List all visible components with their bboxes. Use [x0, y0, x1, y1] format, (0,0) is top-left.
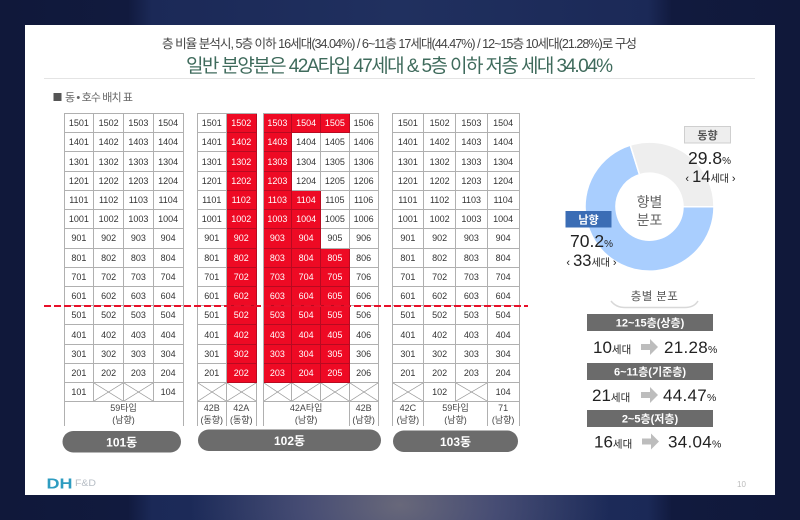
logo: F&D	[75, 478, 97, 488]
table: building 103 units: 1002	[430, 214, 450, 224]
page number: 10	[737, 480, 746, 489]
table: building 101 units: 1001	[69, 214, 89, 224]
table: building 102 right line units: 1203	[267, 176, 287, 186]
table: building 103 units: 1004	[493, 214, 513, 224]
table: building 102 right line units: 504	[299, 310, 314, 320]
table: building 103 units: 901	[400, 233, 415, 243]
table: building 102 left line units: 801	[204, 253, 219, 263]
table: building 103 units: 1404	[493, 137, 513, 147]
heading: floor distribution	[611, 290, 698, 308]
table: building 102 right line units: 305	[327, 349, 342, 359]
table: building 102 left line units: 1402	[231, 137, 251, 147]
table: building 102 left line units: 1101	[202, 195, 221, 205]
table: building 102 left line units: 701	[204, 272, 219, 282]
table: building 103 units: 1304	[493, 157, 513, 167]
callout: south facing: ‹ 33세대 ›	[566, 252, 617, 270]
table: building 102 right line units: 42A타입	[290, 403, 322, 413]
callout: east facing: ‹ 14세대 ›	[685, 168, 736, 186]
table: building 102 right line units: 1005	[325, 214, 345, 224]
pill: building 101: 101동	[106, 436, 137, 450]
table: building 101 units: 1204	[158, 176, 178, 186]
table: building 101 units: (남향)	[112, 415, 135, 425]
table: building 103 units: 42C	[400, 403, 416, 413]
table: building 102 right line units: 704	[299, 272, 314, 282]
table: building 102 right line units: 705	[327, 272, 342, 282]
table: building 103 units: 503	[464, 310, 479, 320]
callout: east facing: 동향	[697, 128, 718, 142]
table: building 102 left line units: 1002	[231, 214, 251, 224]
table: building 102 right line units: 1206	[354, 176, 374, 186]
table: building 102 right line units: 805	[327, 253, 342, 263]
table: building 102 right line units: 703	[270, 272, 285, 282]
row: high floors: 21.28%	[664, 338, 718, 357]
table: building 103 units: 1401	[398, 137, 418, 147]
table: building 101 units: 1003	[128, 214, 148, 224]
table: building 101 units: 903	[131, 233, 146, 243]
table: building 103 units: 1402	[430, 137, 450, 147]
table: building 102 left line units: (동향)	[230, 415, 253, 425]
table: building 103 units: 801	[400, 253, 415, 263]
table: building 101 units: 1101	[69, 195, 89, 205]
callout: east facing: 29.8%	[688, 148, 731, 168]
table: building 102 left line units: 502	[234, 310, 249, 320]
table: building 103 units: (남향)	[492, 415, 514, 425]
table: building 101 units: 303	[131, 349, 146, 359]
table: building 103 units: 603	[464, 291, 479, 301]
table: building 101 units: 1201	[69, 176, 89, 186]
table: building 102 right line units: 803	[270, 253, 285, 263]
table: building 103 units: 903	[464, 233, 479, 243]
table: building 102 right line units: 503	[270, 310, 285, 320]
floor divider dashed line	[44, 305, 528, 307]
table: building 101 units: 1202	[99, 176, 119, 186]
table: building 103 units: 204	[496, 368, 511, 378]
row: high floors: 12~15층(상층)	[616, 316, 685, 330]
table: building 102 left line units: 601	[204, 291, 219, 301]
table: building 102 right line units: 906	[356, 233, 371, 243]
table: building 101 units: 1303	[128, 157, 148, 167]
table: building 101 units: 1302	[99, 157, 119, 167]
table: building 101 units: 702	[101, 272, 116, 282]
table: building 102 left line units: 702	[234, 272, 249, 282]
table: building 102 right line units: 903	[270, 233, 285, 243]
table: building 102 right line units: 1106	[354, 195, 373, 205]
callout: east facing	[684, 126, 736, 186]
table: building 102 right line units: 403	[270, 330, 285, 340]
table: building 101 units: 804	[161, 253, 176, 263]
table: building 103 units: 504	[496, 310, 511, 320]
table: building 101 units: 502	[101, 310, 116, 320]
table: building 101 units: 801	[71, 253, 86, 263]
table: building 101 units: 1503	[128, 118, 148, 128]
table: building 102 right line units: 1103	[268, 195, 287, 205]
table: building 101 units: 1102	[99, 195, 118, 205]
table: building 103 units: 1201	[398, 176, 418, 186]
table: building 103 units: 1103	[462, 195, 481, 205]
headline: 일반 분양분은 42A타입 47세대 & 5층 이하 저층 세대 34.04%	[186, 55, 613, 77]
table: building 103 units: 501	[400, 310, 415, 320]
table: building 101 units: 501	[71, 310, 86, 320]
subtitle: 층 비율 분석시, 5층 이하 16세대(34.04%) / 6~11층 17세대(44.47%) / 12~15층 10세대(21.28%)로 구성	[162, 37, 637, 51]
table: building 102 right line units: 606	[356, 291, 371, 301]
table: building 101 units: 504	[161, 310, 176, 320]
table: building 102 right line units: 1004	[296, 214, 316, 224]
table: building 103 units: 802	[432, 253, 447, 263]
table: building 102 left line units: 1202	[231, 176, 251, 186]
table: building 101 units: 604	[161, 291, 176, 301]
table: building 103 units: 303	[464, 349, 479, 359]
row: low floors	[587, 410, 722, 452]
table: building 102 right line units: 405	[327, 330, 342, 340]
table: building 102 right line units: 205	[327, 368, 342, 378]
table: building 102 right line units: 1003	[267, 214, 287, 224]
table: building 102 left line units: 202	[234, 368, 249, 378]
table: building 102 left line units: 1502	[231, 118, 251, 128]
table: building 102 left line units: 802	[234, 253, 249, 263]
donut chart: orientation split: 향별	[637, 194, 662, 210]
table: building 103 units: 1003	[461, 214, 481, 224]
table: building 103 units: 704	[496, 272, 511, 282]
table: building 103 units: 1501	[398, 118, 418, 128]
callout: south facing: 70.2%	[570, 231, 613, 251]
table: building 101 units: 703	[131, 272, 146, 282]
table: building 103 units: 1303	[461, 157, 481, 167]
table: building 102 right line units: 603	[270, 291, 285, 301]
section label: unit layout table: 동 • 호수 배치 표	[65, 91, 133, 104]
table: building 103 units: (남향)	[397, 415, 419, 425]
table: building 101 units: 1103	[129, 195, 148, 205]
table: building 103 units: 1102	[430, 195, 449, 205]
row: high floors	[587, 314, 718, 357]
table: building 101 units: 803	[131, 253, 146, 263]
table: building 102 right line units: 1205	[325, 176, 345, 186]
table: building 101 units: 302	[101, 349, 116, 359]
table: building 102 right line units: 1105	[325, 195, 345, 205]
table: building 103 units: 1301	[398, 157, 418, 167]
table: building 103 units: 202	[432, 368, 447, 378]
table: building 102 left line units: 1001	[202, 214, 222, 224]
table: building 101 units: 1002	[99, 214, 119, 224]
table: building 102 left line units: 401	[204, 330, 219, 340]
table: building 102 right line units: 1306	[354, 157, 374, 167]
table: building 103 units: 902	[432, 233, 447, 243]
table: building 101 units: 1401	[69, 137, 89, 147]
table: building 101 units: 403	[131, 330, 146, 340]
table: building 101 units: 902	[101, 233, 116, 243]
table: building 103 units: 1302	[430, 157, 450, 167]
row: mid floors: 21세대	[592, 386, 630, 405]
table: building 103 units: 601	[400, 291, 415, 301]
table: building 101 units: 1004	[158, 214, 178, 224]
table: building 102 right line units: 303	[270, 349, 285, 359]
table: building 103 units: 1504	[493, 118, 513, 128]
table: building 101 units: 59타입	[110, 403, 137, 413]
table: building 103 units: 402	[432, 330, 447, 340]
table: building 103 units: 203	[464, 368, 479, 378]
table: building 102 right line units: 1505	[325, 118, 345, 128]
table: building 101 units: 1504	[158, 118, 178, 128]
callout: south facing	[566, 211, 617, 270]
row: low floors: 16세대	[594, 432, 632, 452]
table: building 101 units: 404	[161, 330, 176, 340]
table: building 101 units: 101	[71, 387, 86, 397]
table: building 102 left line units: 901	[204, 233, 219, 243]
donut chart: orientation split: 분포	[637, 212, 662, 228]
table: building 102 left line units: 602	[234, 291, 249, 301]
table: building 102 right line units: 1006	[354, 214, 374, 224]
table: building 102 right line units: 1406	[354, 137, 374, 147]
table: building 102 right line units: 904	[299, 233, 314, 243]
table: building 103 units: 102	[432, 387, 447, 397]
table: building 101 units: 704	[161, 272, 176, 282]
table: building 103 units: (남향)	[444, 415, 467, 425]
table: building 101 units: 904	[161, 233, 176, 243]
table: building 101 units: 201	[71, 368, 86, 378]
table: building 103 units: 302	[432, 349, 447, 359]
table: building 103 units: 502	[432, 310, 447, 320]
table: building 102 left line units: 201	[204, 368, 219, 378]
table: building 102 left line units: 1201	[202, 176, 222, 186]
table: building 102 left line units: (동향)	[200, 415, 223, 425]
table: building 103 units: 604	[496, 291, 511, 301]
table: building 102 right line units	[262, 113, 378, 426]
table: building 101 units: 104	[161, 387, 176, 397]
table: building 101 units: 701	[71, 272, 86, 282]
table: building 102 right line units: 706	[356, 272, 371, 282]
pill: building 102	[198, 430, 381, 451]
pill: building 101	[62, 431, 181, 452]
table: building 103 units: 404	[496, 330, 511, 340]
table: building 102 right line units: 505	[327, 310, 342, 320]
table: building 103 units: 1203	[461, 176, 481, 186]
table: building 102 right line units: 605	[327, 291, 342, 301]
pill: building 103	[393, 430, 518, 452]
table: building 102 right line units: 604	[299, 291, 314, 301]
table: building 102 right line units: 404	[299, 330, 314, 340]
table: building 101 units: 401	[71, 330, 86, 340]
logo	[46, 476, 97, 492]
table: building 101 units: 603	[131, 291, 146, 301]
table: building 102 left line units: 402	[234, 330, 249, 340]
table: building 103 units: 403	[464, 330, 479, 340]
table: building 101 units: 1501	[69, 118, 89, 128]
row: low floors: 2~5층(저층)	[622, 412, 679, 426]
table: building 102 left line units: 1301	[202, 157, 222, 167]
table: building 101 units: 301	[71, 349, 86, 359]
table: building 103 units: 59타입	[442, 403, 469, 413]
row: mid floors	[587, 363, 717, 405]
table: building 103 units: 904	[496, 233, 511, 243]
table: building 102 right line units: 304	[299, 349, 314, 359]
logo: DH	[46, 476, 72, 492]
table: building 101 units: 1301	[69, 157, 89, 167]
table: building 102 right line units: (남향)	[352, 415, 375, 425]
table: building 102 right line units: 206	[356, 368, 371, 378]
callout: south facing: 남향	[578, 212, 599, 226]
table: building 103 units: 1403	[461, 137, 481, 147]
table: building 102 left line units: 42B	[204, 403, 220, 413]
table: building 101 units: 1203	[128, 176, 148, 186]
row: high floors: 10세대	[593, 338, 631, 357]
table: building 101 units: 1304	[158, 157, 178, 167]
table: building 103 units: 304	[496, 349, 511, 359]
heading: floor distribution: 층별 분포	[631, 290, 678, 303]
table: building 102 right line units: 1104	[296, 195, 316, 205]
row: low floors: 34.04%	[668, 432, 722, 452]
table: building 102 right line units: 1303	[267, 157, 287, 167]
table: building 102 right line units: 905	[327, 233, 342, 243]
table: building 103 units: 71	[498, 403, 508, 413]
table: building 102 right line units: 1506	[354, 118, 374, 128]
table: building 102 right line units: 1403	[267, 137, 287, 147]
table: building 103 units: 1101	[398, 195, 418, 205]
pill: building 102: 102동	[274, 434, 305, 448]
table: building 103 units: 1204	[493, 176, 513, 186]
row: mid floors: 44.47%	[663, 386, 717, 405]
table: building 102 left line units: 1102	[232, 195, 251, 205]
table: building 102 right line units: 1503	[267, 118, 287, 128]
table: building 102 right line units: 1204	[296, 176, 316, 186]
table: building 103 units: 201	[400, 368, 415, 378]
table: building 101 units: 901	[71, 233, 86, 243]
table: building 101 units: 503	[131, 310, 146, 320]
table: building 102 right line units: 306	[356, 349, 371, 359]
table: building 103 units: 1202	[430, 176, 450, 186]
table: building 102 right line units: 806	[356, 253, 371, 263]
table: building 102 left line units: 42A	[233, 403, 249, 413]
table: building 103 units: 602	[432, 291, 447, 301]
table: building 101 units: 802	[101, 253, 116, 263]
table: building 101 units: 304	[161, 349, 176, 359]
table: building 103 units: 104	[496, 387, 511, 397]
table: building 102 right line units: 1305	[325, 157, 345, 167]
table: building 102 right line units: 804	[299, 253, 314, 263]
table: building 102 right line units: 506	[356, 310, 371, 320]
table: building 102 left line units: 302	[234, 349, 249, 359]
table: building 102 left line units: 301	[204, 349, 219, 359]
table: building 103 units: 701	[400, 272, 415, 282]
table: building 101 units: 402	[101, 330, 116, 340]
table: building 101 units: 1502	[99, 118, 119, 128]
donut chart: orientation split	[585, 142, 714, 271]
pill: building 103: 103동	[440, 435, 471, 449]
table: building 102 right line units: 406	[356, 330, 371, 340]
table: building 101 units	[64, 113, 184, 426]
table: building 102 right line units: 204	[299, 368, 314, 378]
table: building 102 left line units: 1501	[202, 118, 222, 128]
table: building 102 right line units: 1404	[296, 137, 316, 147]
table: building 102 right line units: 42B	[356, 403, 372, 413]
table: building 101 units: 203	[131, 368, 146, 378]
table: building 103 units: 703	[464, 272, 479, 282]
table: building 103 units: 804	[496, 253, 511, 263]
table: building 101 units: 1404	[158, 137, 178, 147]
table: building 102 left line units: 902	[234, 233, 249, 243]
table: building 102 left line units: 1401	[202, 137, 222, 147]
row: mid floors: 6~11층(기준층)	[614, 364, 686, 378]
table: building 102 right line units: 1304	[296, 157, 316, 167]
table: building 102 left line units	[196, 113, 256, 426]
table: building 101 units: 202	[101, 368, 116, 378]
table: building 101 units: 1403	[128, 137, 148, 147]
table: building 103 units: 401	[400, 330, 415, 340]
table: building 103 units: 1001	[398, 214, 418, 224]
table: building 103 units	[392, 113, 520, 426]
table: building 103 units: 1502	[430, 118, 450, 128]
table: building 101 units: 1104	[158, 195, 178, 205]
table: building 101 units: 204	[161, 368, 176, 378]
table: building 103 units: 301	[400, 349, 415, 359]
table: building 103 units: 803	[464, 253, 479, 263]
table: building 101 units: 601	[71, 291, 86, 301]
table: building 103 units: 702	[432, 272, 447, 282]
table: building 103 units: 1104	[493, 195, 513, 205]
table: building 102 left line units: 1302	[231, 157, 251, 167]
table: building 102 left line units: 501	[204, 310, 219, 320]
table: building 101 units: 1402	[99, 137, 119, 147]
table: building 102 right line units: 1504	[296, 118, 316, 128]
table: building 102 right line units: 203	[270, 368, 285, 378]
table: building 101 units: 602	[101, 291, 116, 301]
table: building 103 units: 1503	[461, 118, 481, 128]
table: building 102 right line units: 1405	[325, 137, 345, 147]
table: building 102 right line units: (남향)	[295, 415, 317, 425]
